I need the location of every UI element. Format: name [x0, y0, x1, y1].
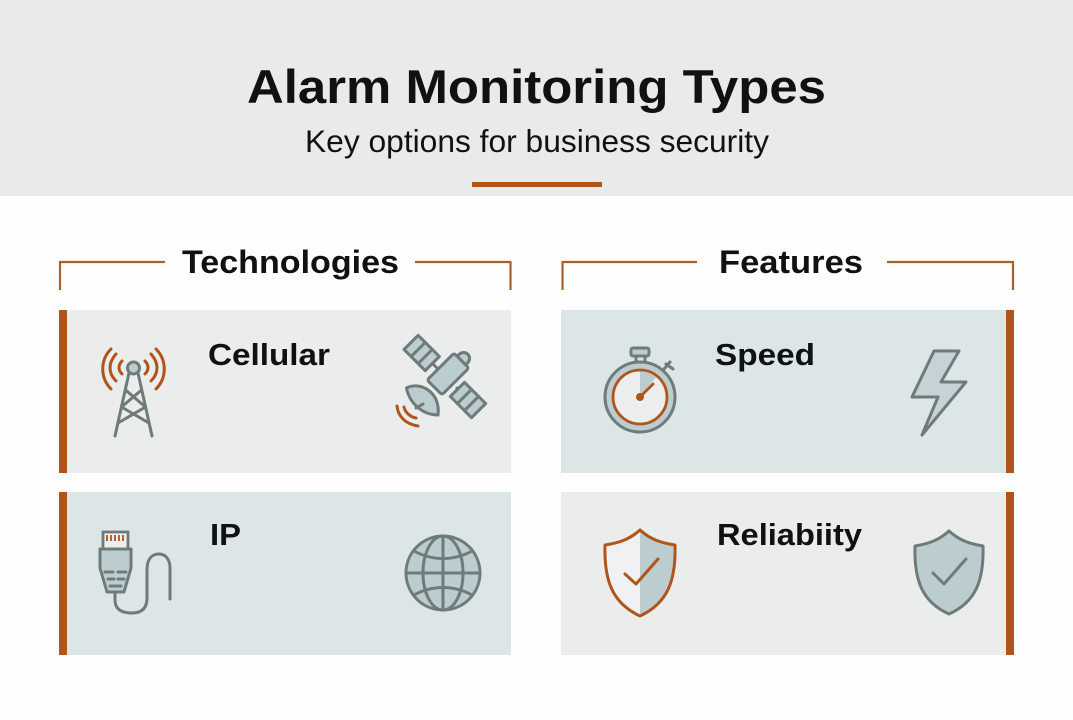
icon: cell tower — [103, 349, 164, 436]
label: Cellular: Cellular — [208, 337, 330, 372]
section heading: Technologies: Technologies — [182, 244, 399, 280]
panel: IP — [59, 492, 511, 655]
panel: Reliability — [561, 492, 1014, 655]
panel: Speed — [561, 310, 1014, 473]
icon: stopwatch — [605, 348, 675, 432]
panel: Cellular — [59, 310, 511, 473]
icon: lightning bolt — [912, 351, 966, 435]
label: IP: IP — [210, 517, 241, 552]
header accent line — [472, 182, 602, 187]
icon: globe — [406, 536, 480, 610]
section heading: Features: Features — [719, 244, 863, 280]
icon: ethernet cable — [100, 532, 170, 613]
subtitle: Key options for business security — [305, 123, 769, 159]
section heading: Technologies — [60, 244, 510, 290]
label: Reliabiity: Reliabiity — [717, 517, 863, 552]
icon: orange shield — [605, 530, 675, 616]
label: Speed: Speed — [715, 337, 815, 372]
header band — [0, 0, 1073, 196]
icon: grey shield — [915, 531, 983, 614]
section heading: Features — [562, 244, 1013, 290]
title: Alarm Monitoring Types — [247, 60, 826, 113]
icon: satellite — [397, 335, 486, 426]
